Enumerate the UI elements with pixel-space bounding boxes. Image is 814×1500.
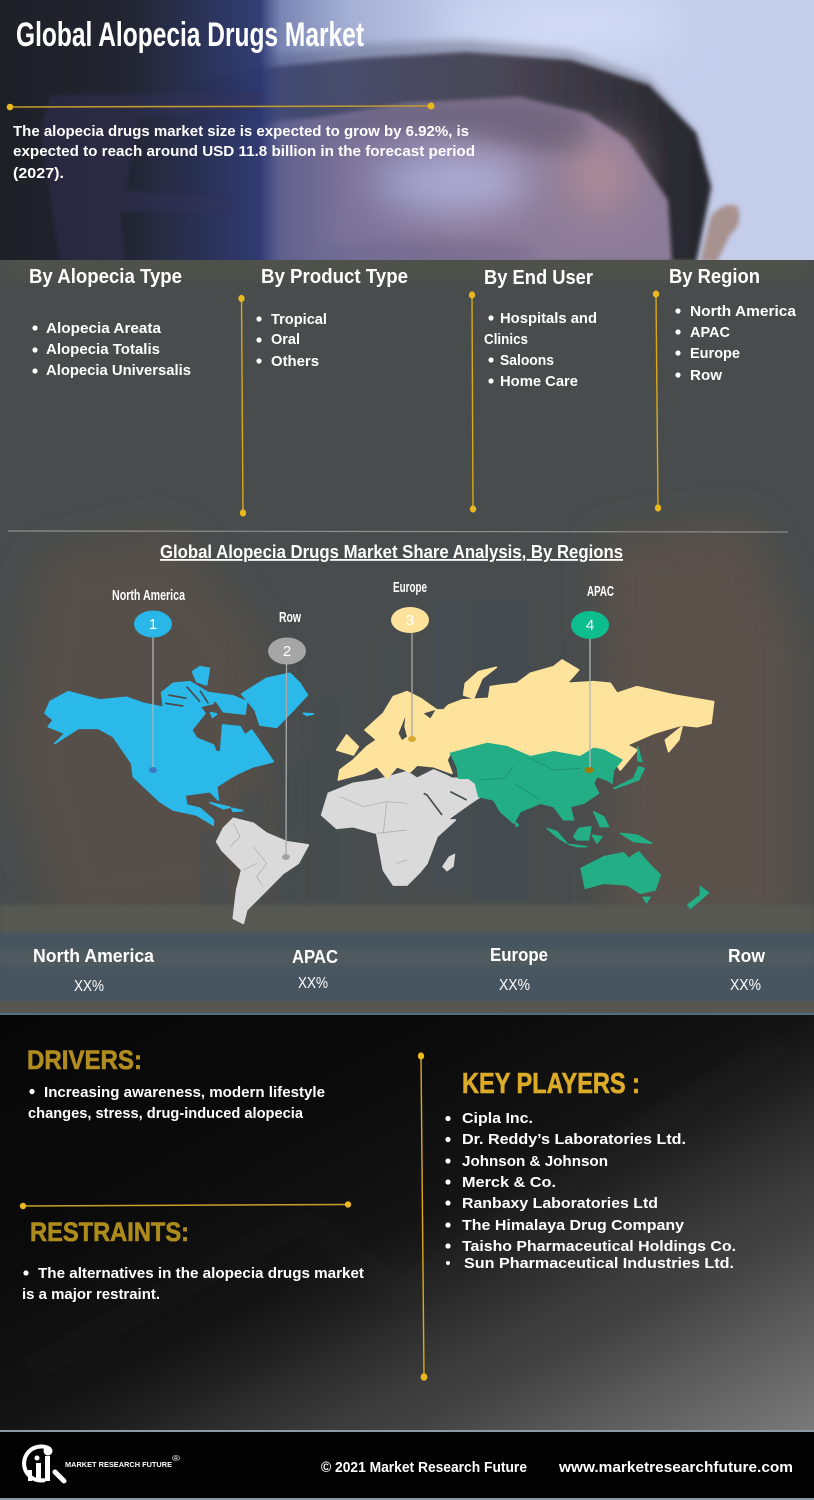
website: www.marketresearchfuture.com (558, 1459, 793, 1476)
restraints: is a major restraint. (22, 1286, 160, 1303)
panel: drivers restraints key players (0, 1015, 814, 1432)
key players: Johnson & Johnson (462, 1153, 608, 1170)
list: regions (675, 303, 797, 384)
key players: Dr. Reddy’s Laboratories Ltd. (462, 1131, 686, 1148)
list: regions: Row (690, 367, 722, 384)
pin 3: europe: 3 (406, 612, 414, 629)
key players: Cipla Inc. (462, 1110, 533, 1127)
map: north america (45, 667, 313, 825)
panel: by end user (484, 267, 597, 390)
heading: by alopecia type: By Alopecia Type (29, 266, 182, 288)
key players: Ranbaxy Laboratories Ltd (462, 1195, 658, 1212)
map: rest of world africa and middle east (322, 770, 480, 885)
hero description: The alopecia drugs market size is expected to grow by 6.92%, is (13, 123, 469, 140)
pin 1: north america: North America (112, 587, 185, 604)
share: europe (490, 945, 548, 994)
share: apac (292, 947, 338, 992)
map: rest of world south america (217, 818, 308, 923)
list: product types: Oral (271, 331, 300, 348)
hero divider line (7, 102, 434, 110)
copyright: © 2021 Market Research Future (321, 1459, 527, 1476)
share: apac: APAC (292, 947, 338, 967)
key players: Sun Pharmaceutical Industries Ltd. (464, 1255, 734, 1272)
list: regions: Europe (690, 345, 740, 362)
pin 1: north america (112, 587, 185, 773)
brand name: MARKET RESEARCH FUTURE (65, 1460, 172, 1469)
key players: Taisho Pharmaceutical Holdings Co. (462, 1238, 736, 1255)
pin 2: row (268, 609, 306, 860)
drivers: DRIVERS: (27, 1045, 142, 1075)
map: europe and russia (337, 660, 714, 780)
drivers: Increasing awareness, modern lifestyle (44, 1084, 325, 1101)
pin 2: row: 2 (283, 643, 291, 660)
heading: market share analysis: Global Alopecia Drugs Market Share Analysis, By Regions (160, 542, 623, 562)
panel: regional share band (0, 933, 814, 1015)
panel: by region (669, 266, 797, 384)
panel: segment background (0, 255, 814, 935)
list: end users: Home Care (500, 373, 578, 390)
world map (45, 660, 714, 923)
heading: by end user: By End User (484, 267, 593, 289)
list: product types: Others (271, 353, 319, 370)
panel: hero banner (0, 0, 814, 269)
share: north america: North America (33, 946, 155, 966)
share: north america: XX% (74, 978, 104, 995)
pin 4: apac (571, 583, 614, 773)
heading: by region: By Region (669, 266, 760, 288)
divider: vertical gold line (418, 1052, 427, 1381)
list: end users (484, 310, 597, 390)
key players: The Himalaya Drug Company (462, 1217, 685, 1234)
pin 4: apac: 4 (586, 617, 594, 634)
brand name (65, 1454, 180, 1469)
share: europe: XX% (499, 977, 530, 994)
pin 2: row: Row (279, 609, 301, 626)
panel: by product type (256, 266, 408, 370)
panel: by alopecia type (29, 266, 191, 379)
hero description: expected to reach around USD 11.8 billion in the forecast period (13, 143, 475, 160)
share: north america (33, 946, 155, 995)
list: end users: Clinics (484, 331, 528, 348)
pin 3: europe: Europe (393, 579, 427, 596)
share: apac: XX% (298, 975, 328, 992)
hero photo: hand (40, 92, 264, 262)
heading: by product type: By Product Type (261, 266, 408, 288)
share: row: XX% (730, 977, 761, 994)
list: regions: APAC (690, 324, 730, 341)
hero description (13, 123, 475, 182)
list: alopecia types (32, 320, 191, 379)
drivers: changes, stress, drug-induced alopecia (28, 1105, 304, 1122)
share: europe: Europe (490, 945, 548, 965)
brand name: ® (172, 1454, 180, 1463)
restraints: RESTRAINTS: (30, 1217, 189, 1247)
drivers (27, 1045, 325, 1122)
list: end users: Hospitals and (500, 310, 597, 327)
icon: market research future logo (24, 1446, 64, 1481)
list: end users: Saloons (500, 352, 554, 369)
map: asia pacific (450, 743, 709, 908)
list: alopecia types: Alopecia Universalis (46, 362, 191, 379)
list: regions: North America (690, 303, 797, 320)
key players: KEY PLAYERS : (462, 1068, 640, 1100)
hero photo: head and hair (261, 36, 742, 260)
title: Global Alopecia Drugs Market (16, 16, 364, 54)
gold column dividers (238, 290, 661, 517)
divider: drivers and restraints (20, 1201, 351, 1209)
panel: footer (0, 1430, 814, 1500)
restraints (22, 1217, 364, 1303)
restraints: The alternatives in the alopecia drugs market (38, 1265, 364, 1282)
list: alopecia types: Alopecia Areata (46, 320, 162, 337)
share: row (728, 946, 766, 994)
pin 1: north america: 1 (149, 616, 157, 633)
pin 4: apac: APAC (587, 583, 614, 600)
list: product types: Tropical (271, 311, 327, 328)
key players: Merck & Co. (462, 1174, 556, 1191)
share: row: Row (728, 946, 766, 966)
list: product types (256, 311, 327, 370)
pin 3: europe (391, 579, 429, 742)
key players (445, 1068, 736, 1272)
list: alopecia types: Alopecia Totalis (46, 341, 160, 358)
hero description: (2027). (13, 165, 64, 182)
